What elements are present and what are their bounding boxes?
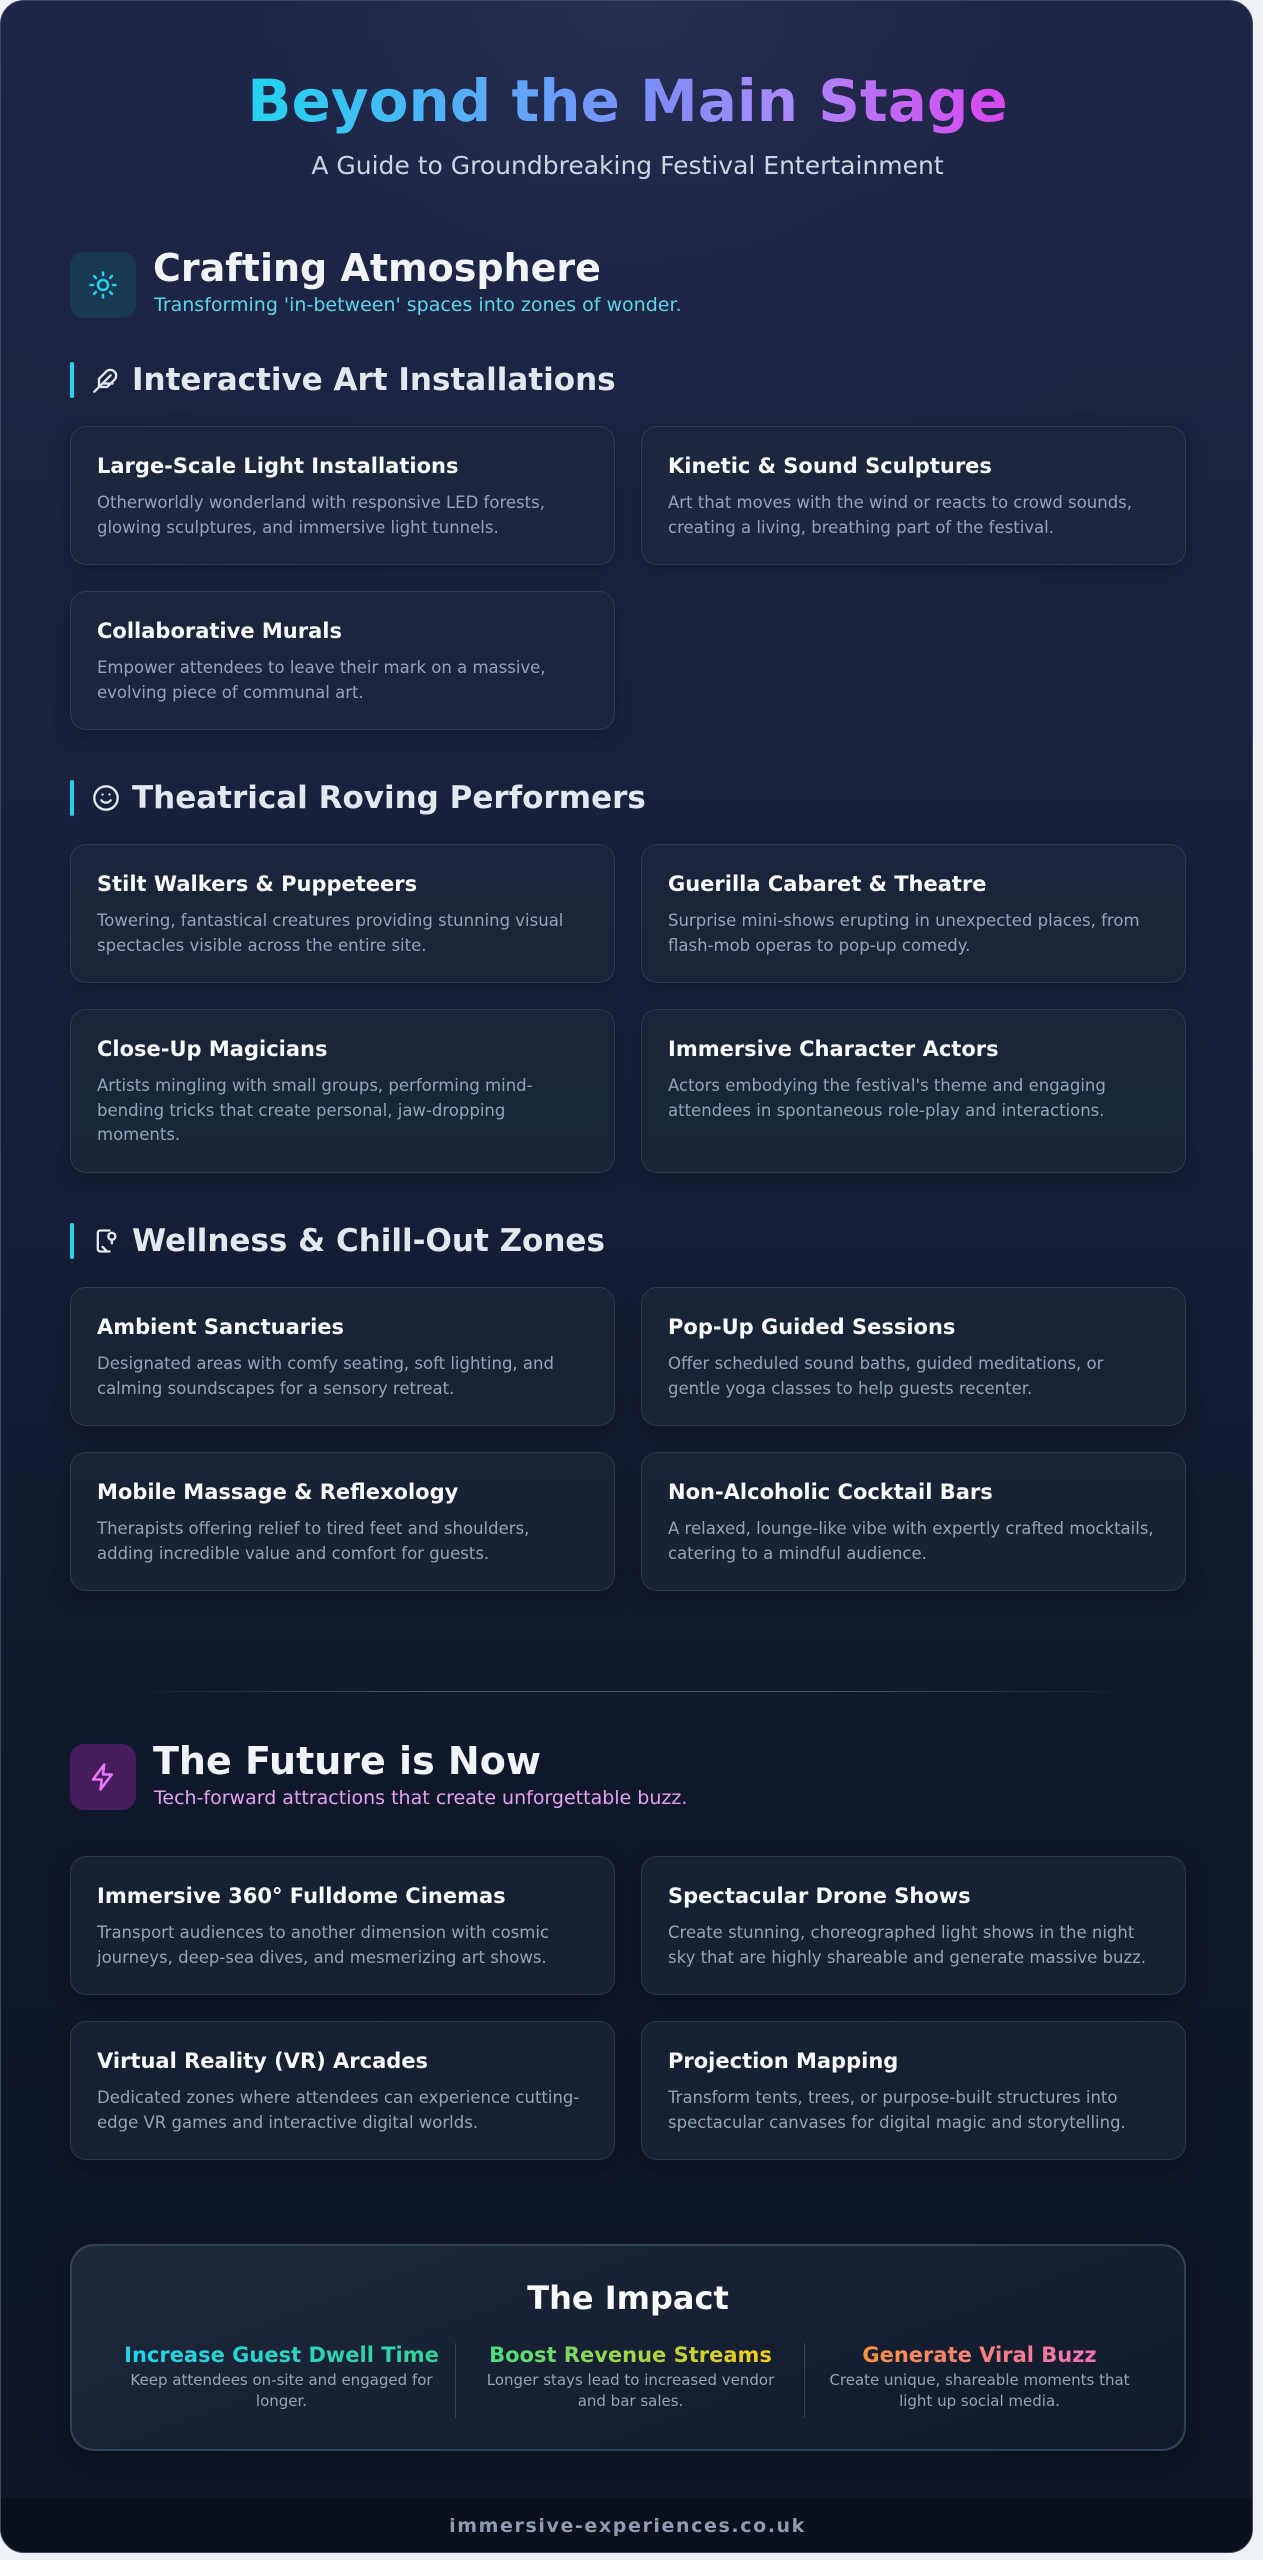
heading: The Future is Now: The Future is Now [153,1739,541,1783]
card: Close-Up Magicians: Artists mingling with small groups, performing mind-bending tricks that create personal, jaw-dropping moments. [97,1076,533,1144]
card: Kinetic & Sound Sculptures: Kinetic & Sound Sculptures [668,454,992,478]
icon: lightning [70,1744,136,1810]
card: Ambient Sanctuaries [70,1287,615,1426]
card: Pop-Up Guided Sessions: Offer scheduled sound baths, guided meditations, or gentle yoga classes to help guests recenter. [668,1354,1103,1398]
footer: immersive-experiences.co.uk [449,2515,806,2537]
card: Drone Shows: Create stunning, choreographed light shows in the night sky that are highly shareable and generate massive buzz. [668,1923,1146,1966]
card: VR Arcades: Dedicated zones where attendees can experience cutting-edge VR games and interactive digital worlds. [97,2088,579,2132]
title: Beyond the Main Stage [247,67,1008,135]
card: Collaborative Murals: Collaborative Murals [97,619,342,643]
card: Stilt Walkers: Towering, fantastical creatures providing stunning visual spectacles visible across the entire site. [97,911,563,954]
impact: dwell time: Increase Guest Dwell Time [124,2343,439,2367]
card: Collaborative Murals: Empower attendees to leave their mark on a massive, evolving piece of communal art. [97,658,546,702]
panel: The Impact [70,2244,1186,2451]
subsection heading: Theatrical Roving Performers: Theatrical Roving Performers [132,780,646,816]
card: Immersive Character Actors: Actors embodying the festival's theme and engaging attendees in spontaneous role-play and interactions. [668,1076,1106,1120]
impact: dwell time: Keep attendees on-site and engaged for longer. [130,2371,433,2410]
card: Pop-Up Guided Sessions: Pop-Up Guided Sessions [668,1315,955,1339]
card: Guerilla Cabaret [641,844,1186,983]
card: Non-Alcoholic Cocktail Bars: Non-Alcoholic Cocktail Bars [668,1480,993,1504]
impact: viral buzz: Generate Viral Buzz [862,2343,1097,2367]
card: Ambient Sanctuaries: Designated areas with comfy seating, soft lighting, and calming soundscapes for a sensory retreat. [97,1354,554,1398]
card: Close-Up Magicians [70,1009,615,1173]
card: Mobile Massage: Therapists offering relief to tired feet and shoulders, adding incredible value and comfort for guests. [97,1519,529,1562]
icon: sun [70,252,136,318]
card: Large-Scale Light Installations [70,426,615,565]
card: Large-Scale Light Installations: Otherworldly wonderland with responsive LED forests, glowing sculptures, and immersive light tunnels. [97,493,545,536]
subsection heading: Interactive Art Installations: Interactive Art Installations [132,362,616,398]
card: Non-Alcoholic Cocktail Bars: A relaxed, lounge-like vibe with expertly crafted mocktails, catering to a mindful audience. [668,1519,1154,1562]
card: Close-Up Magicians: Close-Up Magicians [97,1037,327,1061]
card: 360 Fulldome [70,1856,615,1995]
card: Drone Shows: Spectacular Drone Shows [668,1884,971,1908]
card: Non-Alcoholic Cocktail Bars [641,1452,1186,1591]
card: Immersive Character Actors: Immersive Character Actors [668,1037,999,1061]
card: Guerilla Cabaret: Surprise mini-shows erupting in unexpected places, from flash-mob operas to pop-up comedy. [668,911,1140,954]
card: Large-Scale Light Installations: Large-Scale Light Installations [97,454,458,478]
card: VR Arcades [70,2021,615,2160]
card: Immersive Character Actors [641,1009,1186,1173]
card: Projection Mapping: Projection Mapping [668,2049,898,2073]
subtitle: A Guide to Groundbreaking Festival Entertainment [311,151,944,180]
card: Projection Mapping [641,2021,1186,2160]
subheading: Tech-forward attractions that create unforgettable buzz. [154,1787,687,1809]
impact title: The Impact [527,2279,729,2317]
card: 360 Fulldome: Immersive 360° Fulldome Cinemas [97,1884,506,1908]
card: Kinetic & Sound Sculptures [641,426,1186,565]
card: 360 Fulldome: Transport audiences to another dimension with cosmic journeys, deep-sea dives, and mesmerizing art shows. [97,1923,549,1966]
card: Drone Shows [641,1856,1186,1995]
footer [1,2498,1254,2554]
card: Guerilla Cabaret: Guerilla Cabaret & Theatre [668,872,987,896]
card: Pop-Up Guided Sessions [641,1287,1186,1426]
heading: Crafting Atmosphere: Crafting Atmosphere [153,246,601,290]
card: Stilt Walkers [70,844,615,983]
card: VR Arcades: Virtual Reality (VR) Arcades [97,2049,428,2073]
card: Kinetic & Sound Sculptures: Art that moves with the wind or reacts to crowd sounds, creating a living, breathing part of the festival. [668,493,1132,536]
card: Projection Mapping: Transform tents, trees, or purpose-built structures into spectacular canvases for digital magic and storytelling. [668,2088,1126,2132]
impact: revenue [487,2343,774,2410]
impact: dwell time [124,2343,439,2410]
card: Collaborative Murals [70,591,615,730]
impact: viral buzz: Create unique, shareable moments that light up social media. [829,2371,1130,2410]
card: Ambient Sanctuaries: Ambient Sanctuaries [97,1315,344,1339]
impact: revenue: Longer stays lead to increased vendor and bar sales. [487,2371,774,2410]
impact: viral buzz [829,2343,1130,2410]
subsection heading: Wellness & Chill-Out Zones: Wellness & Chill-Out Zones [132,1223,605,1259]
impact: revenue: Boost Revenue Streams [489,2343,772,2367]
card: Mobile Massage: Mobile Massage & Reflexology [97,1480,458,1504]
card: Stilt Walkers: Stilt Walkers & Puppeteers [97,872,417,896]
card: Mobile Massage [70,1452,615,1591]
subheading: Transforming 'in-between' spaces into zones of wonder. [154,294,682,316]
